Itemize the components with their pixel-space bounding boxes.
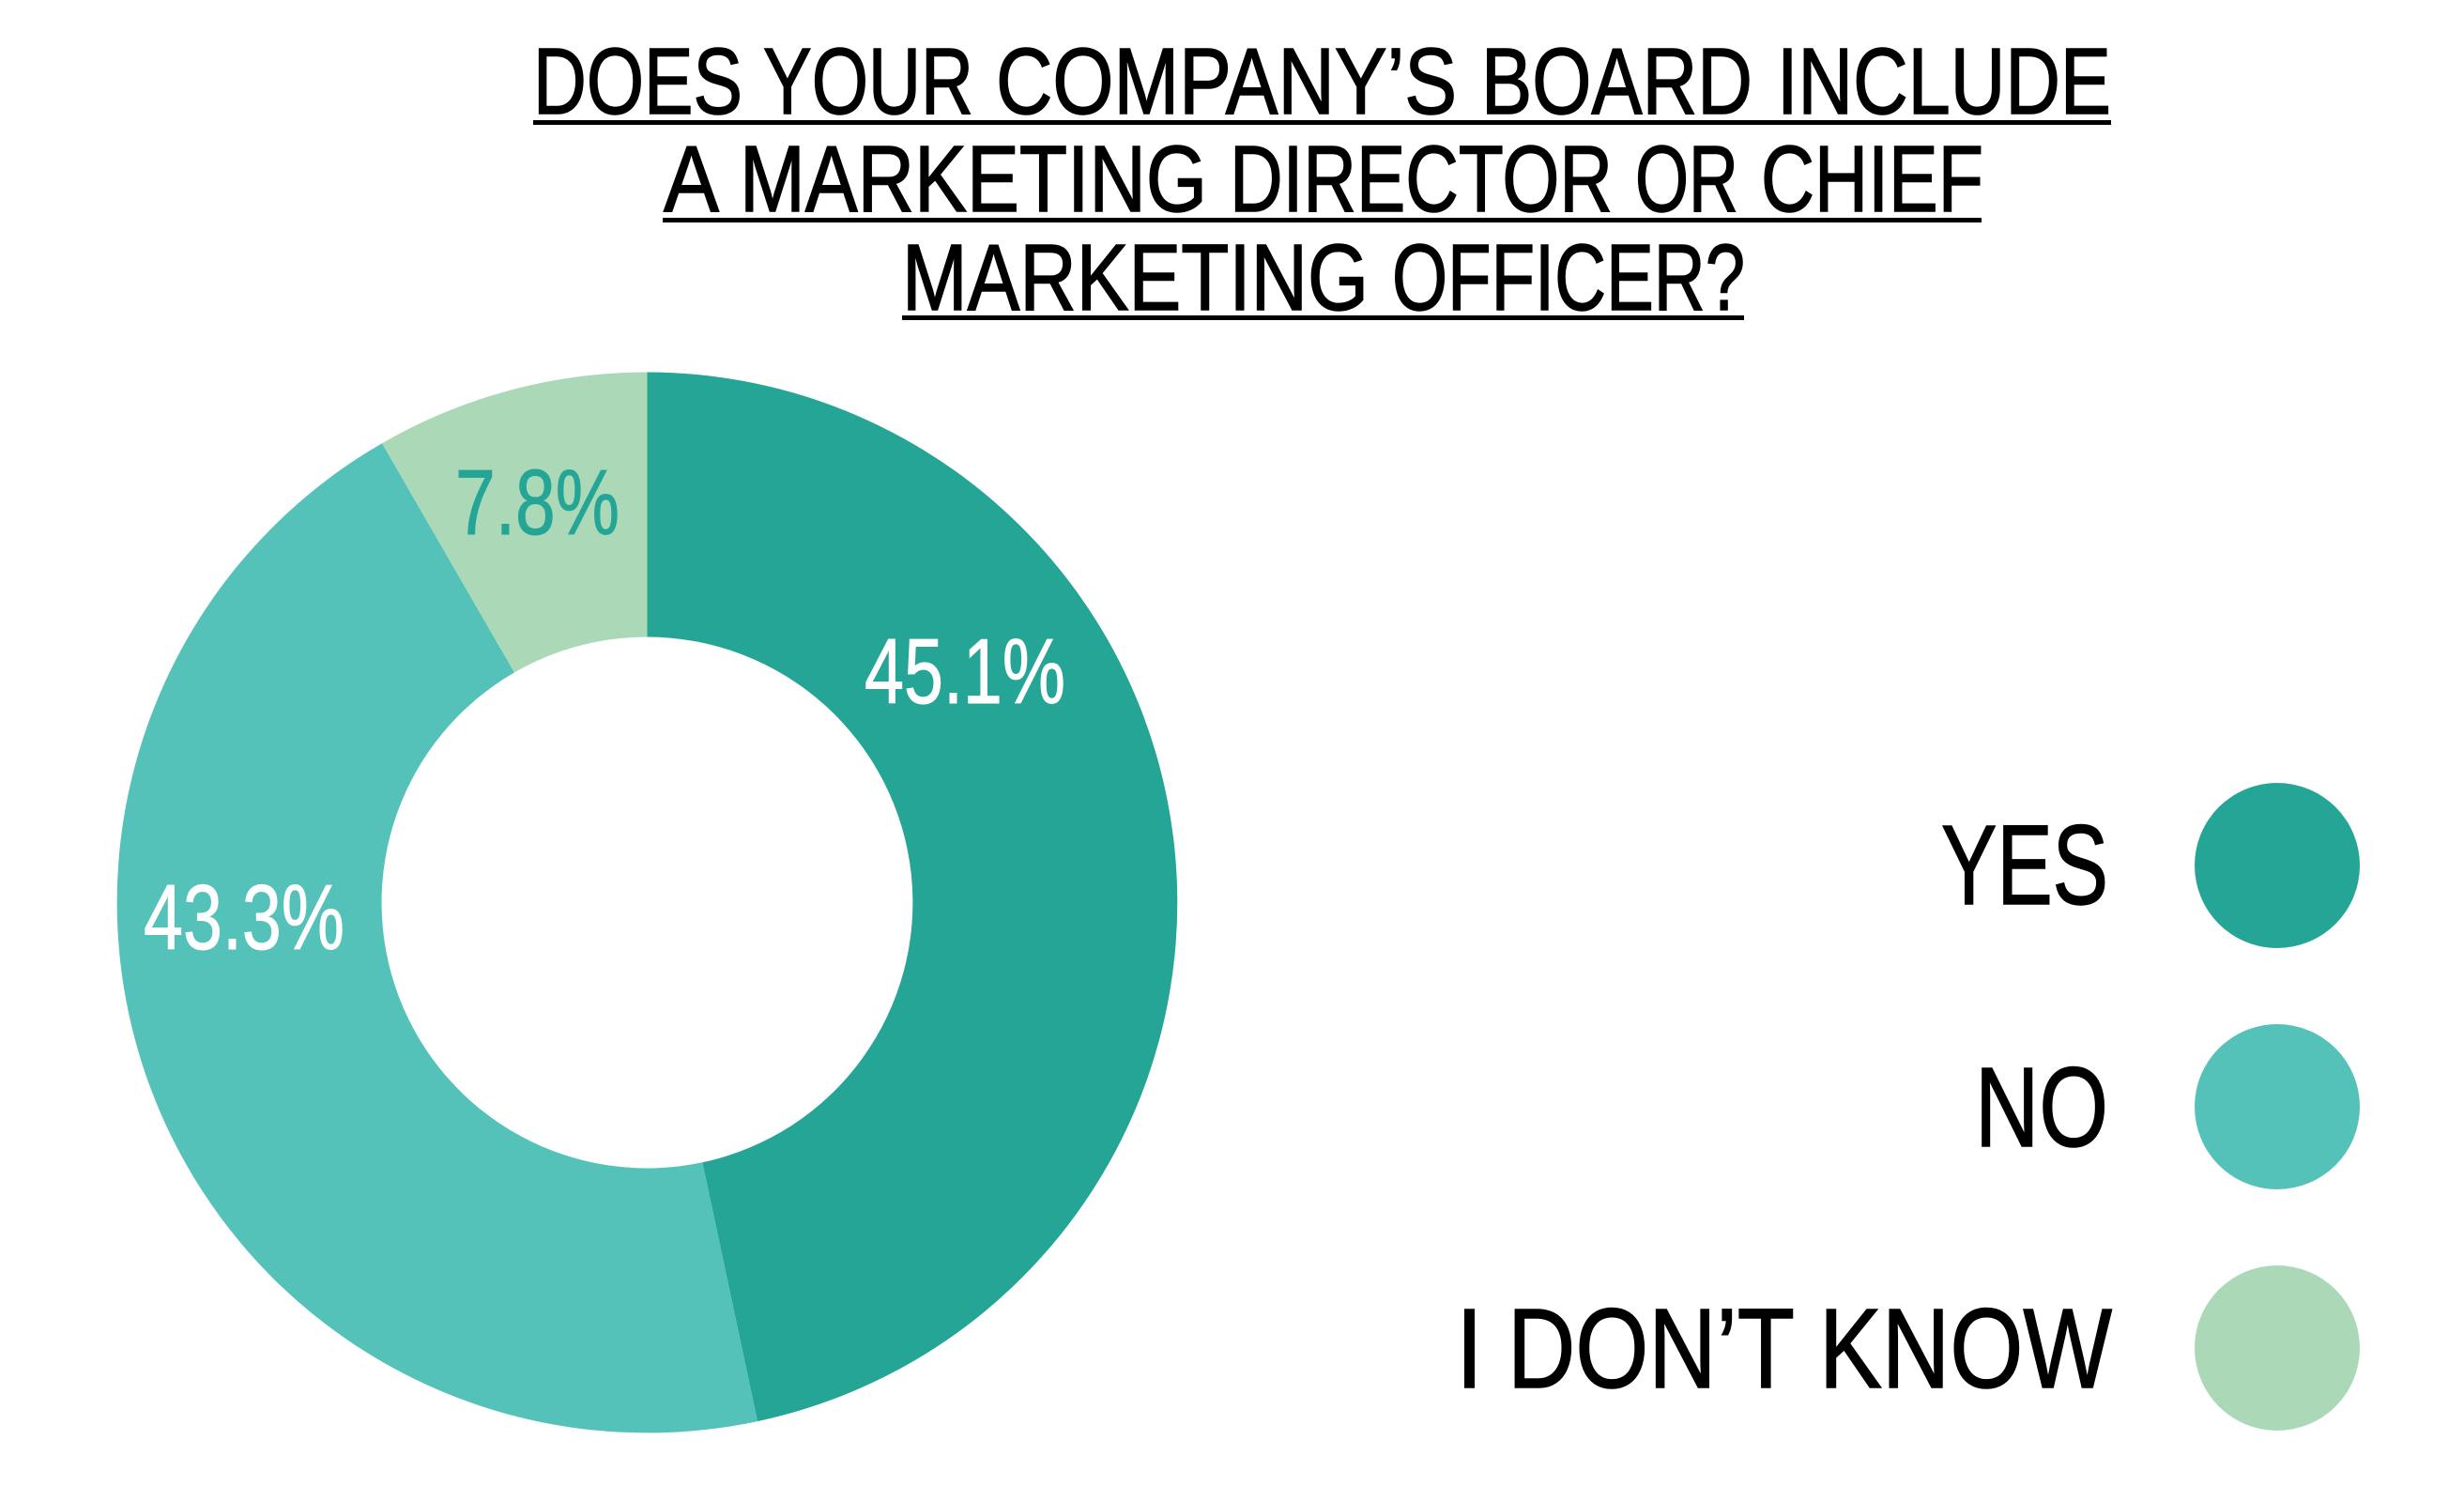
title line 2: OR: [1635, 127, 1738, 232]
donut chart: [117, 372, 1177, 1432]
value label: 7.8%: 7.8%: [455, 451, 620, 554]
title line 2: DIRECTOR: [1230, 127, 1613, 232]
title line 3: [902, 225, 1745, 330]
title line 1: YOUR: [763, 29, 973, 134]
slice: yes 45.1%: [648, 372, 1177, 1421]
legend item: no: NO: [1975, 1043, 2108, 1171]
slice: no 43.3%: [117, 443, 758, 1432]
slice: i don't know 7.8%: [382, 372, 648, 672]
title line 3: OFFICER?: [1392, 225, 1745, 330]
title line 2: [663, 127, 1983, 232]
title line 2: CHIEF: [1761, 127, 1983, 232]
legend item: i don't know: KNOW: [1819, 1284, 2112, 1412]
legend item: yes: [1941, 783, 2360, 948]
value label: 43.3%: 43.3%: [144, 866, 344, 969]
legend item: i don't know: I: [1456, 1284, 1483, 1412]
legend: [1456, 783, 2360, 1431]
title line 1: DOES: [533, 29, 742, 134]
legend item: yes: YES: [1941, 801, 2108, 928]
legend item: i don't know: DON’T: [1507, 1284, 1795, 1412]
title line 1: INCLUDE: [1777, 29, 2111, 134]
title line 1: [533, 29, 2111, 134]
title line 1: COMPANY’S: [996, 29, 1457, 134]
value label: 45.1%: 45.1%: [865, 620, 1065, 723]
title line 1: BOARD: [1481, 29, 1752, 134]
legend item: no: [1975, 1024, 2360, 1189]
title line 2: MARKETING: [740, 127, 1207, 232]
title: [533, 29, 2111, 330]
legend item: i don't know: [1456, 1265, 2360, 1431]
title line 2: A: [664, 127, 719, 232]
title line 3: MARKETING: [902, 225, 1369, 330]
